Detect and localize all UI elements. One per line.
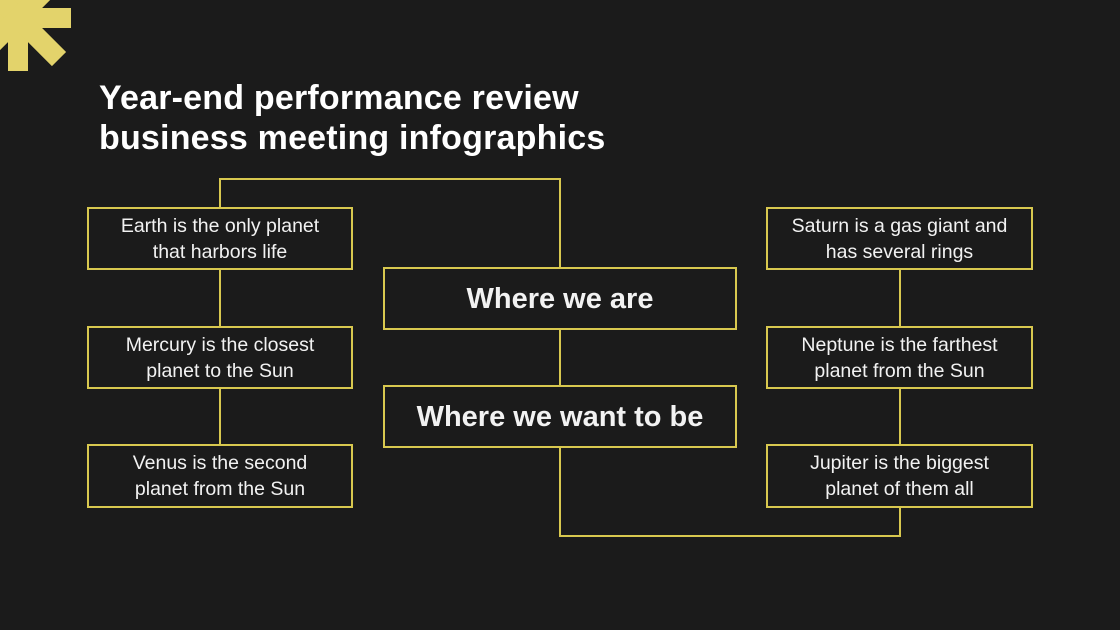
box: where we want to be: Where we want to be <box>417 400 703 432</box>
box: neptune: planet from the Sun <box>814 360 985 382</box>
box: venus: planet from the Sun <box>135 478 305 500</box>
title: business meeting infographics <box>99 119 605 157</box>
box: earth: that harbors life <box>153 240 287 262</box>
box: saturn <box>766 207 1033 270</box>
box: where we are: Where we are <box>466 282 653 314</box>
box: mercury: Mercury is the closest <box>126 334 314 356</box>
box: neptune <box>766 326 1033 389</box>
title: Year-end performance review <box>99 79 579 117</box>
icon: star burst <box>0 0 71 71</box>
box: jupiter: Jupiter is the biggest <box>810 452 989 474</box>
box: mercury <box>87 326 353 389</box>
box: venus: Venus is the second <box>133 452 307 474</box>
box: where we want to be <box>383 385 737 448</box>
box: where we are <box>383 267 737 330</box>
box: neptune: Neptune is the farthest <box>801 334 998 356</box>
box: venus <box>87 444 353 508</box>
box: saturn: Saturn is a gas giant and <box>792 214 1007 236</box>
box: earth <box>87 207 353 270</box>
title <box>99 79 605 157</box>
box: jupiter <box>766 444 1033 508</box>
box: earth: Earth is the only planet <box>121 214 319 236</box>
box: jupiter: planet of them all <box>825 478 974 500</box>
box: saturn: has several rings <box>826 240 973 262</box>
box: mercury: planet to the Sun <box>146 360 294 382</box>
